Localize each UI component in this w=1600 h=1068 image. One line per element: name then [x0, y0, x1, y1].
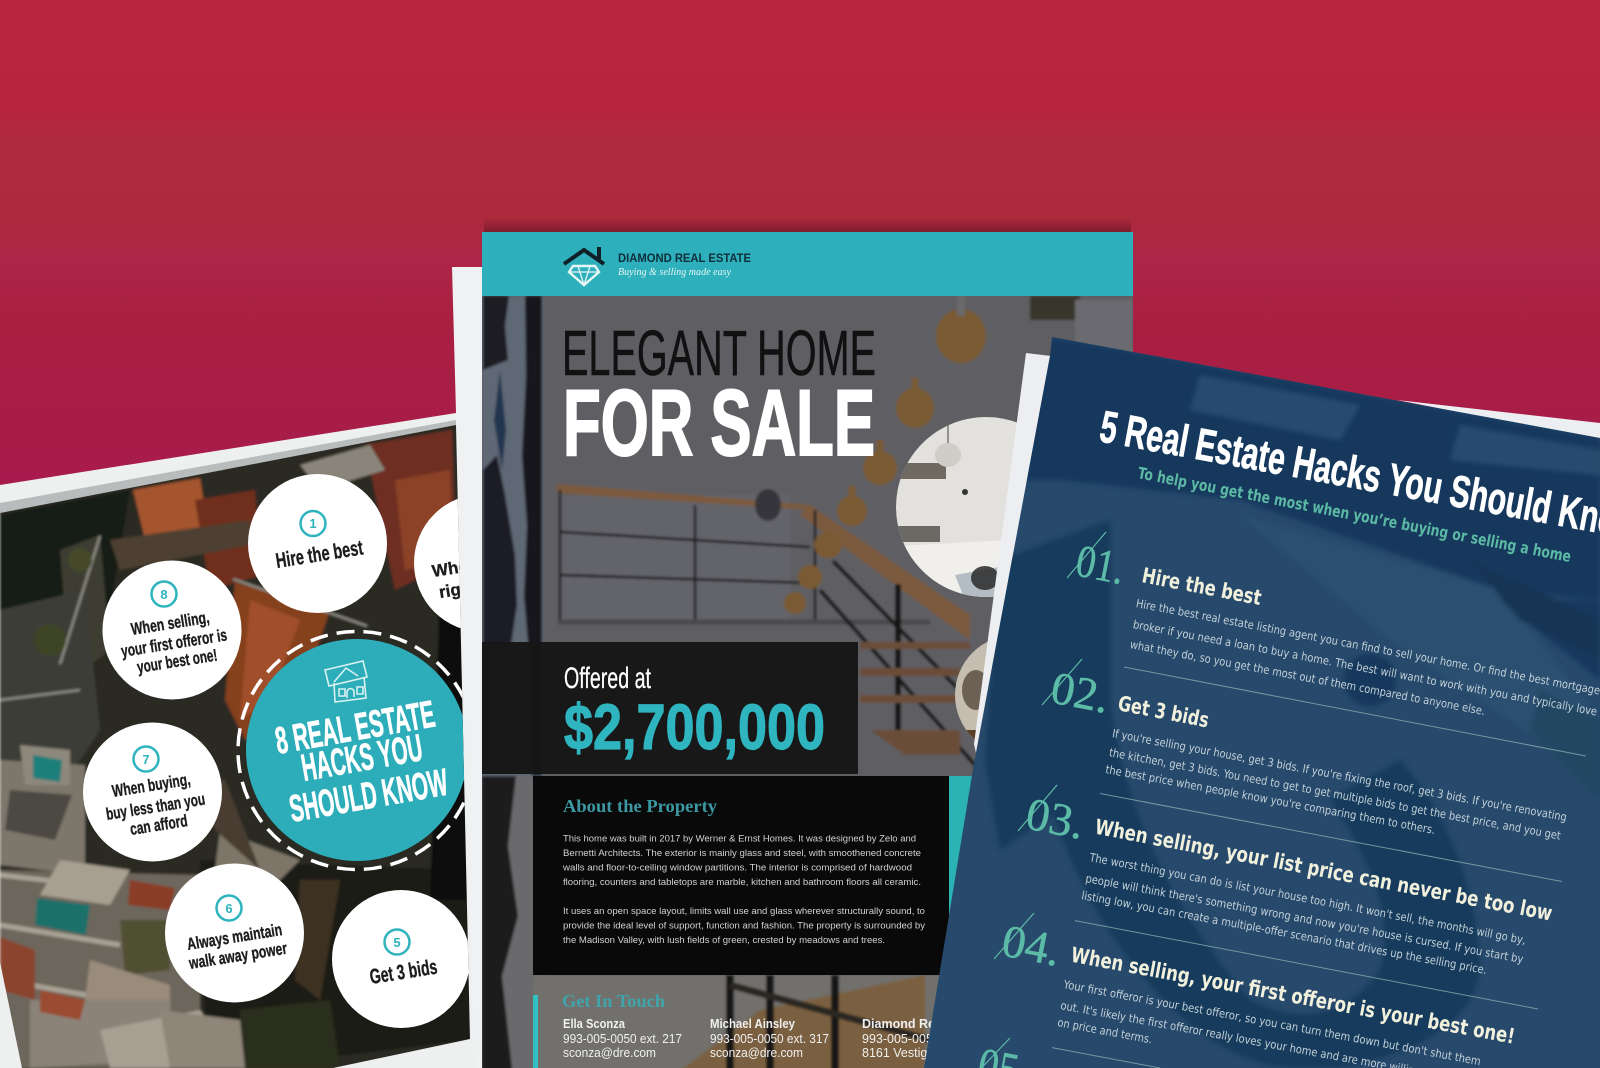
hack 3: listing low, you can create a multiple-offer scenario that drives up the selling price. [1080, 888, 1488, 977]
panel: about the property [533, 776, 949, 975]
hack 2: the best price when people know you're comparing them to others. [1104, 762, 1436, 837]
circle 7 [83, 722, 222, 862]
hack 4: on price and terms. [1056, 1015, 1153, 1046]
circle 1: 1 [309, 516, 317, 531]
paper: white sheet [0, 413, 482, 1068]
circle 6: walk away power [187, 939, 289, 973]
circle 8: 8 [160, 587, 168, 602]
panel: about the property: flooring, counters and tabletops are marble, kitchen and bathroom floors all ceramic. [563, 877, 921, 888]
hack 1: 01. [1072, 535, 1129, 594]
title: ELEGANT HOME [562, 317, 876, 389]
hack 3: people will think there's something wrong and now you're house is cursed. If you start by [1084, 871, 1525, 966]
panel: get in touch: Ella Sconza [563, 1017, 626, 1031]
panel: centre flyer white edge [452, 267, 482, 1068]
circle 6: Always maintain [186, 920, 283, 954]
circle 8: When selling, [130, 608, 211, 639]
hack 2: 02. [1047, 662, 1114, 723]
panel: get in touch: 8161 Vestige Ave [862, 1046, 958, 1060]
panel: get in touch [533, 994, 932, 1068]
brand text: DIAMOND REAL ESTATE [618, 253, 751, 265]
icon: house [325, 661, 367, 702]
circle 2 partly hidden: When [431, 555, 479, 581]
hack 3: The worst thing you can do is list your house too high. It won't sell, the months will go by, [1088, 850, 1527, 947]
panel: about the property: It uses an open space layout, limits wall use and glass wherever structurally sound, to [563, 906, 925, 917]
living room photo circle [955, 642, 990, 742]
icon: logo house and diamond [564, 247, 604, 285]
railing [560, 490, 815, 622]
kitchen photo circle [896, 417, 1017, 597]
wall ornament [755, 489, 781, 521]
panel: get in touch: 993-005-0050 [862, 1032, 940, 1046]
lower photo strip [502, 776, 534, 1068]
panel: right flyer paper edges [974, 353, 1600, 753]
panel: about the property: walls and floor-to-ceiling window partitions. The interior is comprised of hardwood [562, 862, 912, 874]
circle 7: When buying, [111, 770, 192, 801]
price band [482, 642, 858, 774]
panel: about the property: the Madison Valley, with lush fields of green, crested by meadows and trees. [563, 935, 885, 946]
circle 7: can afford [129, 811, 189, 839]
hack 2: Get 3 bids [1116, 691, 1211, 732]
page background pattern [920, 330, 1600, 1068]
central teal title circle [238, 632, 476, 870]
hack 4 [994, 913, 1517, 1068]
stair treads [860, 642, 970, 755]
hack 1: Hire the best [1140, 563, 1263, 610]
solid photo base [482, 296, 1133, 520]
central teal title circle: 8 REAL ESTATE [272, 694, 438, 763]
circle 7: buy less than you [105, 790, 206, 824]
shadow above flyer [484, 220, 1131, 232]
hack 1 [1067, 532, 1600, 756]
interior photo [482, 296, 1133, 1068]
circle 5: Get 3 bids [368, 956, 439, 989]
circle 8: your first offeror is [120, 625, 228, 661]
panel: get in touch: Get In Touch [562, 991, 665, 1011]
circle 8: your best one! [136, 646, 219, 677]
circle 6: 6 [225, 901, 233, 916]
panel: about the property: About the Property [563, 796, 717, 816]
aerial neighbourhood photo [0, 425, 470, 1068]
panel: about the property: This home was built in 2017 by Werner & Ernst Homes. It was designed by Zelo and [563, 834, 916, 844]
central teal title circle: SHOULD KNOW [286, 762, 451, 831]
central teal title circle: HACKS YOU [298, 727, 426, 790]
paper: shadow under top edge [0, 420, 456, 515]
circle 1 [248, 474, 387, 613]
panel: about the property: provide the ideal level of support, function and fashion. The property is surrounded by [563, 920, 925, 932]
price band: Offered at [564, 662, 651, 695]
circle 1: Hire the best [274, 536, 365, 573]
panel: get in touch: sconza@dre.com [710, 1046, 803, 1060]
price band: $2,700,000 [564, 691, 825, 763]
title [565, 330, 874, 457]
circle 6 [165, 864, 304, 1002]
circle 2 partly hidden [414, 498, 461, 628]
hack 4: 04. [998, 915, 1065, 976]
panel: left flyer, 8 real estate hacks [0, 413, 474, 1068]
circle 5: 5 [393, 935, 401, 950]
hack 1: what they do, so you get the most out of them compared to anyone else. [1129, 637, 1486, 718]
panel: get in touch: 993-005-0050 ext. 317 [710, 1032, 829, 1046]
panel: right flyer, 5 real estate hacks [920, 330, 1600, 1068]
circle 7: 7 [142, 752, 150, 767]
header bar [482, 232, 1133, 296]
wooden handrail [557, 484, 810, 510]
hack 2 [1042, 659, 1568, 882]
panel: get in touch: Diamond Real Estate [862, 1017, 986, 1031]
panel: get in touch: sconza@dre.com [563, 1046, 656, 1060]
background: red gradient [0, 0, 1600, 520]
panel: get in touch: 993-005-0050 ext. 217 [563, 1032, 682, 1046]
title: FOR SALE [563, 370, 875, 475]
pendant lights [784, 296, 986, 614]
hack 3 [1018, 785, 1554, 1009]
hack 3: 03. [1022, 788, 1089, 849]
circle 8 [102, 560, 242, 700]
panel: centre flyer, elegant home for sale [482, 218, 1133, 1068]
circle 5 [332, 890, 470, 1028]
teal side block [949, 776, 972, 915]
header bar: Buying & selling made easy [618, 267, 732, 278]
circle 2 partly hidden: right [438, 577, 478, 602]
panel: get in touch: Michael Ainsley [710, 1017, 795, 1031]
panel: about the property: Bernetti Architects. The exterior is mainly glass and steel, with smoothened concrete [563, 848, 921, 859]
